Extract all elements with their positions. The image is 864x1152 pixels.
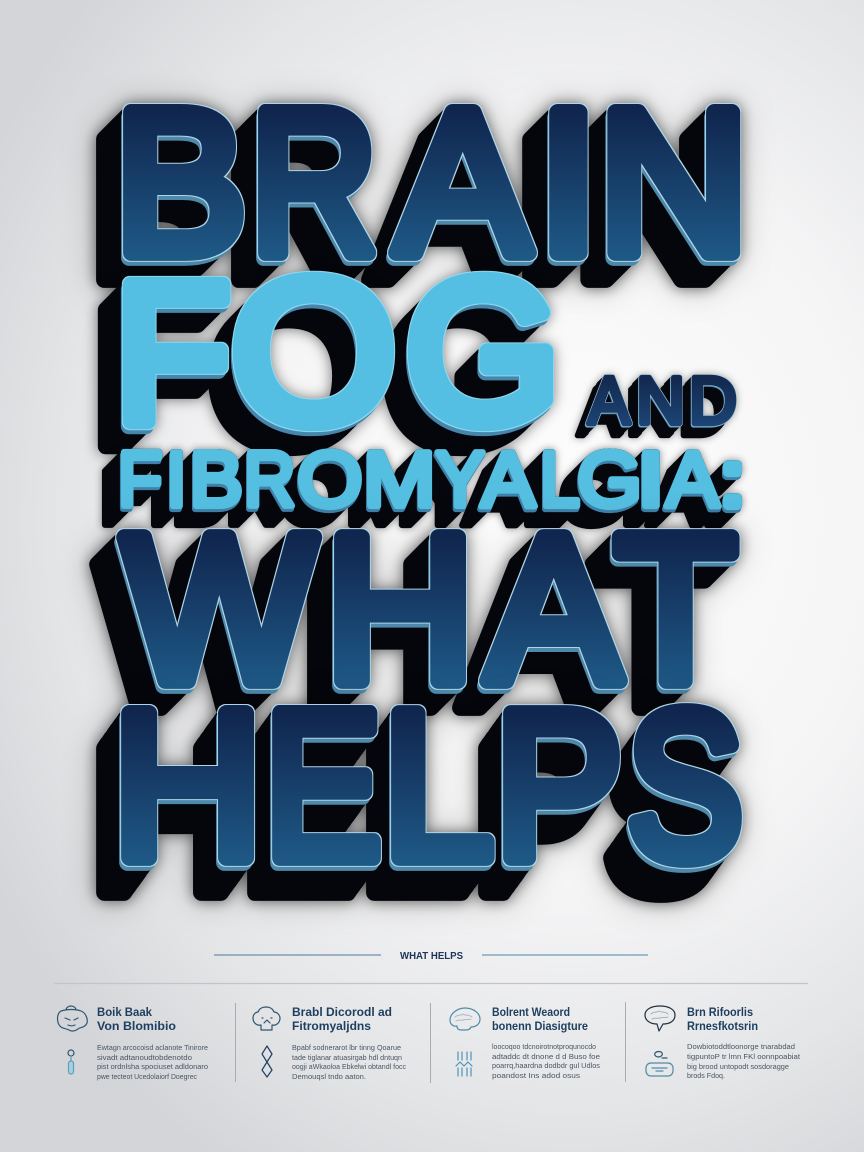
heading: [292, 1007, 392, 1033]
title word: FIBROMYALGIA:: A: [481, 435, 535, 523]
title word: FOG: [115, 238, 560, 465]
title word: FOG: F: [115, 243, 230, 464]
title word: BRAIN: A: [396, 68, 529, 296]
title word: HELPS: P: [495, 669, 622, 902]
title word: WHAT: [123, 492, 736, 726]
icon: brain: [450, 1008, 480, 1030]
heading: Brn Rifoorlis: [687, 1007, 753, 1019]
title word: HELPS: L: [383, 669, 493, 903]
body text: adtaddc dt dnone d d Buso foe: [492, 1054, 600, 1061]
title word: WHAT: T: [615, 493, 736, 726]
icon: brain speech bubble: [645, 1006, 675, 1031]
panel: column 4: [645, 1006, 800, 1080]
panel: column 1: [58, 1006, 208, 1081]
panel: column 3: [450, 1007, 601, 1080]
section heading: WHAT HELPS with rules: WHAT HELPS: [400, 950, 463, 962]
body text: tigpuntoP tr lmn FKl oonnpoabiat: [687, 1054, 800, 1061]
title word: FIBROMYALGIA:: M: [363, 435, 436, 523]
title word: FIBROMYALGIA:: I: [166, 436, 187, 523]
title word: FIBROMYALGIA:: R: [244, 435, 296, 523]
heading: [687, 1007, 758, 1033]
title word: WHAT: A: [487, 493, 620, 725]
title word: FOG: G: [406, 239, 560, 465]
title word: FIBROMYALGIA:: [118, 435, 745, 523]
heading: Fitromyaljdns: [292, 1021, 371, 1033]
body text: [492, 1044, 601, 1080]
title word: FIBROMYALGIA:: B: [190, 435, 243, 523]
title word: AND: D: [689, 364, 737, 439]
title word: WHAT: H: [325, 492, 475, 725]
body text: big brood untopodt sosdoragge: [687, 1064, 789, 1071]
heading: Von Blomibio: [97, 1021, 176, 1033]
heading: Bolrent Weaord: [492, 1007, 570, 1019]
body text: [687, 1044, 800, 1080]
heading: bonenn Diasigture: [492, 1021, 588, 1033]
heading: Brabl Dicorodl ad: [292, 1007, 392, 1019]
title word: AND: [588, 363, 737, 439]
body text: poandost Ins adod osus: [492, 1073, 581, 1080]
title word: FIBROMYALGIA:: O: [297, 437, 363, 523]
heading: [492, 1007, 588, 1033]
title word: FOG: O: [231, 238, 396, 464]
body text: Bpabf sodnerarot lbr tinng Qoarue: [292, 1045, 401, 1052]
title word: FIBROMYALGIA:: A: [666, 435, 719, 523]
body text: pist ordnlsha spociuset adldonaro: [97, 1064, 208, 1071]
title word: HELPS: S: [627, 668, 743, 902]
title word: FIBROMYALGIA:: L: [540, 435, 580, 523]
body text: loocoqoo tdcnoirotnotproqunocdo: [492, 1044, 596, 1051]
title word: BRAIN: I: [538, 69, 599, 297]
title word: FIBROMYALGIA:: G: [577, 436, 642, 523]
title word: BRAIN: R: [251, 69, 377, 297]
icon: diamond chain: [262, 1046, 272, 1077]
title word: HELPS: [112, 668, 743, 903]
title word: BRAIN: B: [115, 68, 246, 296]
icon: bed tray: [646, 1052, 673, 1076]
body text: tade tiglanar atuasirgab hdl dntuqn: [292, 1055, 402, 1062]
heading: [97, 1007, 176, 1033]
title word: HELPS: E: [265, 668, 381, 902]
title word: AND: N: [636, 364, 685, 439]
icon: brain face: [58, 1006, 87, 1031]
icon: body diagram: [456, 1052, 472, 1076]
title: Brain Fog and Fibromyalgia: What Helps: [112, 67, 749, 903]
title word: FIBROMYALGIA:: F: [118, 436, 162, 522]
title word: HELPS: H: [112, 669, 263, 903]
body text: Ewtagn arcocoisd aclanote Tinirore: [97, 1045, 208, 1052]
title word: AND: A: [588, 363, 631, 438]
body text: poarrq,haardna dodbdr gul Udlos: [492, 1063, 601, 1070]
title word: BRAIN: [115, 67, 749, 297]
title word: WHAT: W: [123, 492, 315, 725]
body text: Dowbiotoddtloonorge tnarabdad: [687, 1044, 795, 1051]
body text: brods Fdoq.: [687, 1073, 725, 1080]
body text: oogji aWkaoloa Ebkelwi obtandl focc: [292, 1064, 406, 1071]
icon: cloud brain: [253, 1007, 280, 1030]
heading: Boik Baak: [97, 1007, 153, 1019]
title word: BRAIN: N: [599, 67, 749, 296]
title word: FIBROMYALGIA:: Y: [436, 436, 484, 523]
icon: pendulum: [68, 1050, 74, 1074]
panel: column 2: [253, 1007, 406, 1081]
body text: [292, 1045, 406, 1081]
body text: [97, 1045, 208, 1081]
heading: Rrnesfkotsrin: [687, 1021, 758, 1033]
body text: sivadt adtanoudtobdenotdo: [97, 1055, 192, 1062]
title word: FIBROMYALGIA:: I: [637, 436, 665, 523]
title word: FIBROMYALGIA:: :: [720, 436, 745, 522]
body text: Demouqsl tndo aaton.: [292, 1074, 366, 1081]
body text: pwe tecteot Ucedolaiorf Doegrec: [97, 1074, 197, 1081]
